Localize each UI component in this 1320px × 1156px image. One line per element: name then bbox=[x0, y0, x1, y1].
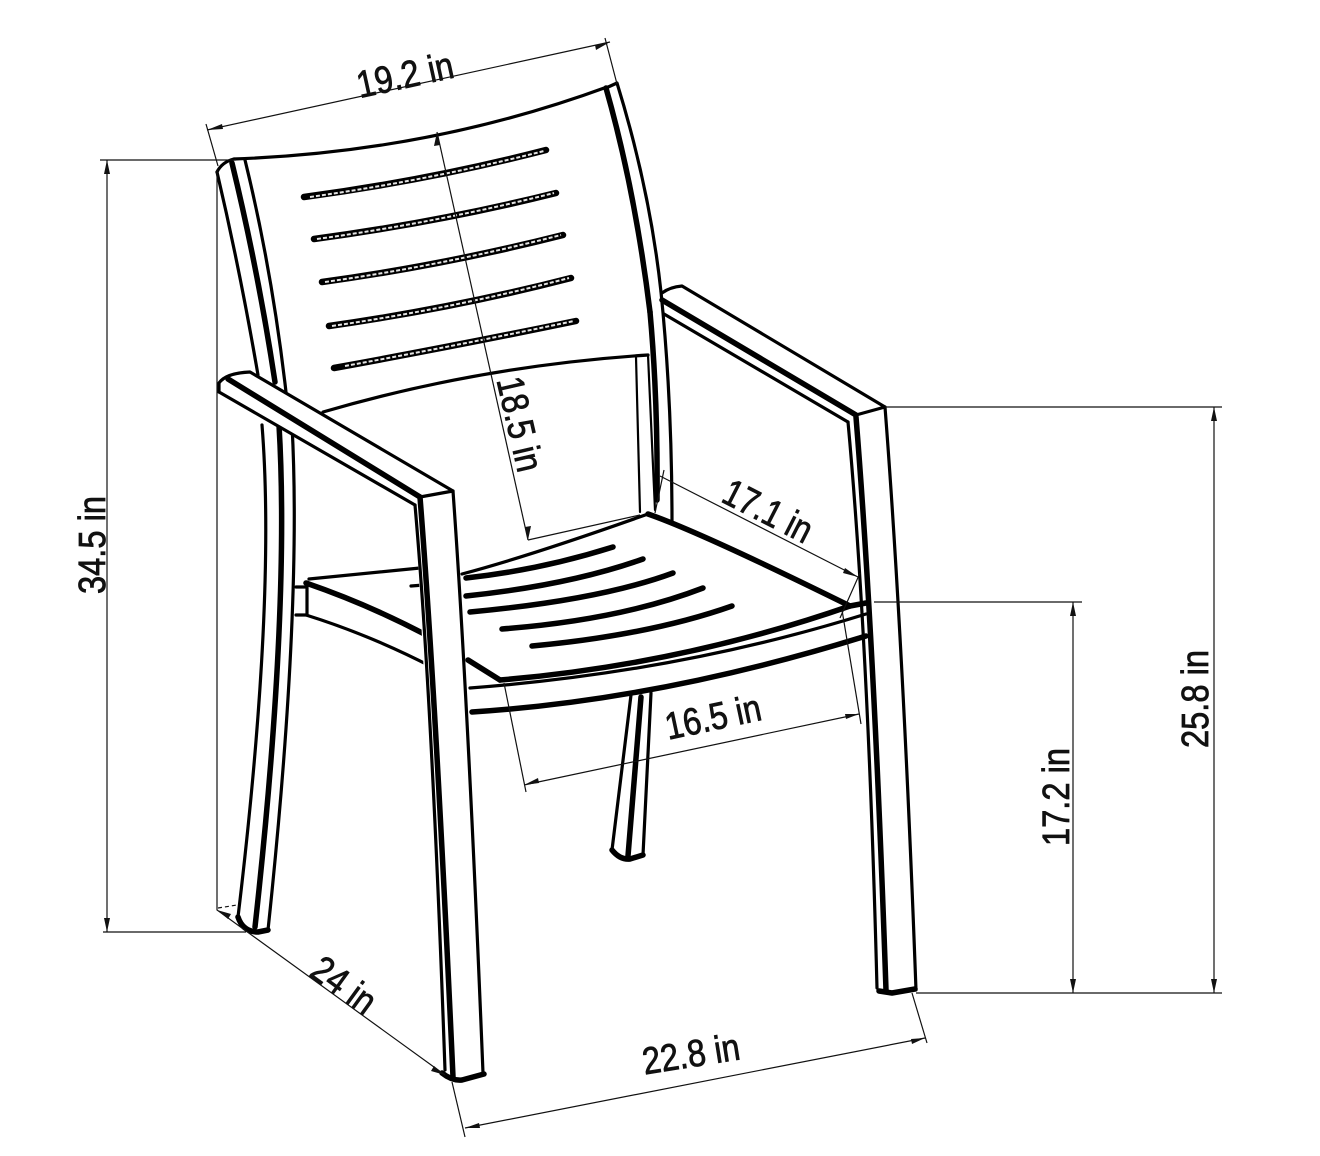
dimension: 25.8 in: 25.8 in bbox=[1175, 650, 1217, 748]
front right post and armrest bbox=[662, 286, 916, 993]
left side seat rail bbox=[296, 568, 432, 667]
dimension: 34.5 in bbox=[72, 160, 246, 932]
dimension: 34.5 in: 34.5 in bbox=[72, 496, 114, 594]
chair backrest with slats bbox=[217, 83, 661, 512]
dimension: 22.8 in bbox=[452, 993, 927, 1137]
dimension: 24 in bbox=[217, 170, 445, 1075]
chair line drawing bbox=[217, 83, 916, 1080]
dimension: 17.2 in: 17.2 in bbox=[1036, 748, 1078, 846]
dimension: 17.1 in bbox=[655, 470, 860, 618]
dimension: 16.5 in bbox=[504, 610, 861, 792]
dimension: 16.5 in: 16.5 in bbox=[661, 687, 765, 749]
dimension: 19.2 in: 19.2 in bbox=[353, 45, 458, 107]
dimension: 19.2 in bbox=[206, 38, 617, 166]
seat with slats bbox=[462, 514, 866, 712]
dimension: 17.2 in bbox=[874, 602, 1082, 993]
rear right post bbox=[648, 292, 672, 522]
dimension: 18.5 in bbox=[434, 132, 640, 540]
rear left leg bbox=[238, 425, 294, 932]
front left post and armrest bbox=[219, 372, 484, 1080]
rear right leg bbox=[612, 693, 651, 859]
dimension: 22.8 in: 22.8 in bbox=[639, 1027, 743, 1083]
dimension: 24 in: 24 in bbox=[303, 948, 384, 1023]
dimension: 17.1 in: 17.1 in bbox=[716, 472, 819, 552]
dimension: 25.8 in bbox=[885, 407, 1222, 993]
dimension: 18.5 in: 18.5 in bbox=[488, 373, 550, 476]
